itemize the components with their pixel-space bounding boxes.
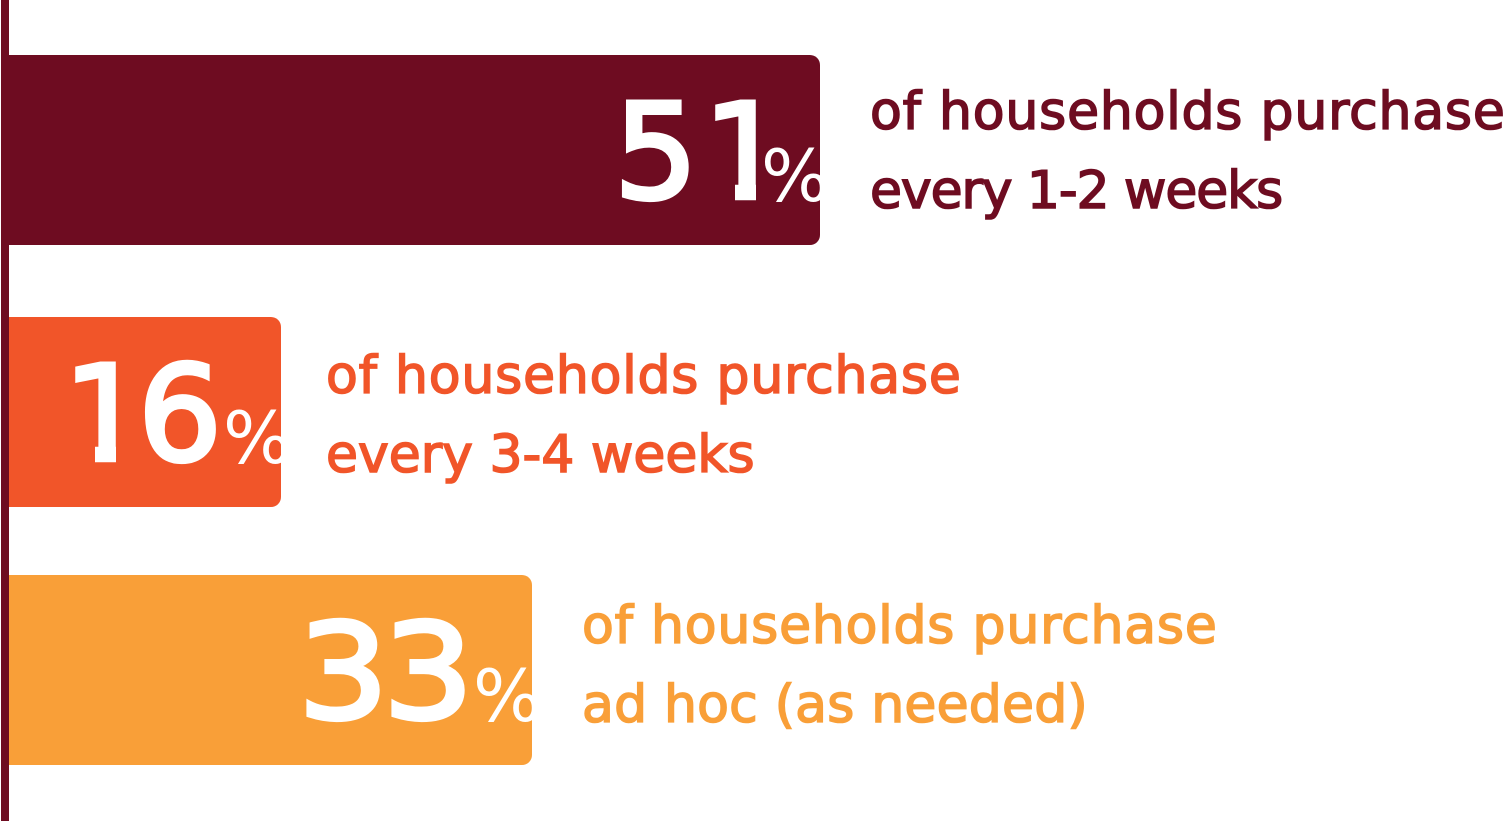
vertical axis line: [1, 0, 9, 821]
label: every 3-4 weeks: [326, 346, 962, 485]
label: every 1-2 weeks: every 1-2 weeks: [870, 161, 1282, 221]
value: 51: 51: [614, 76, 792, 230]
label: ad hoc: ad hoc (as needed): [582, 675, 1088, 735]
value: 16: 16: [63, 338, 213, 492]
bar: 51%: [9, 55, 820, 245]
value: 33: 33: [298, 596, 468, 750]
label: ad hoc: of households purchase: [582, 596, 1218, 656]
bar: 33%: [9, 575, 532, 765]
bar: 16%: [9, 317, 281, 507]
label: every 1-2 weeks: of households purchase: [870, 82, 1506, 142]
label: ad hoc: [582, 596, 1218, 735]
label: every 1-2 weeks: [870, 82, 1506, 221]
label: every 3-4 weeks: every 3-4 weeks: [326, 425, 755, 485]
label: every 3-4 weeks: of households purchase: [326, 346, 962, 406]
